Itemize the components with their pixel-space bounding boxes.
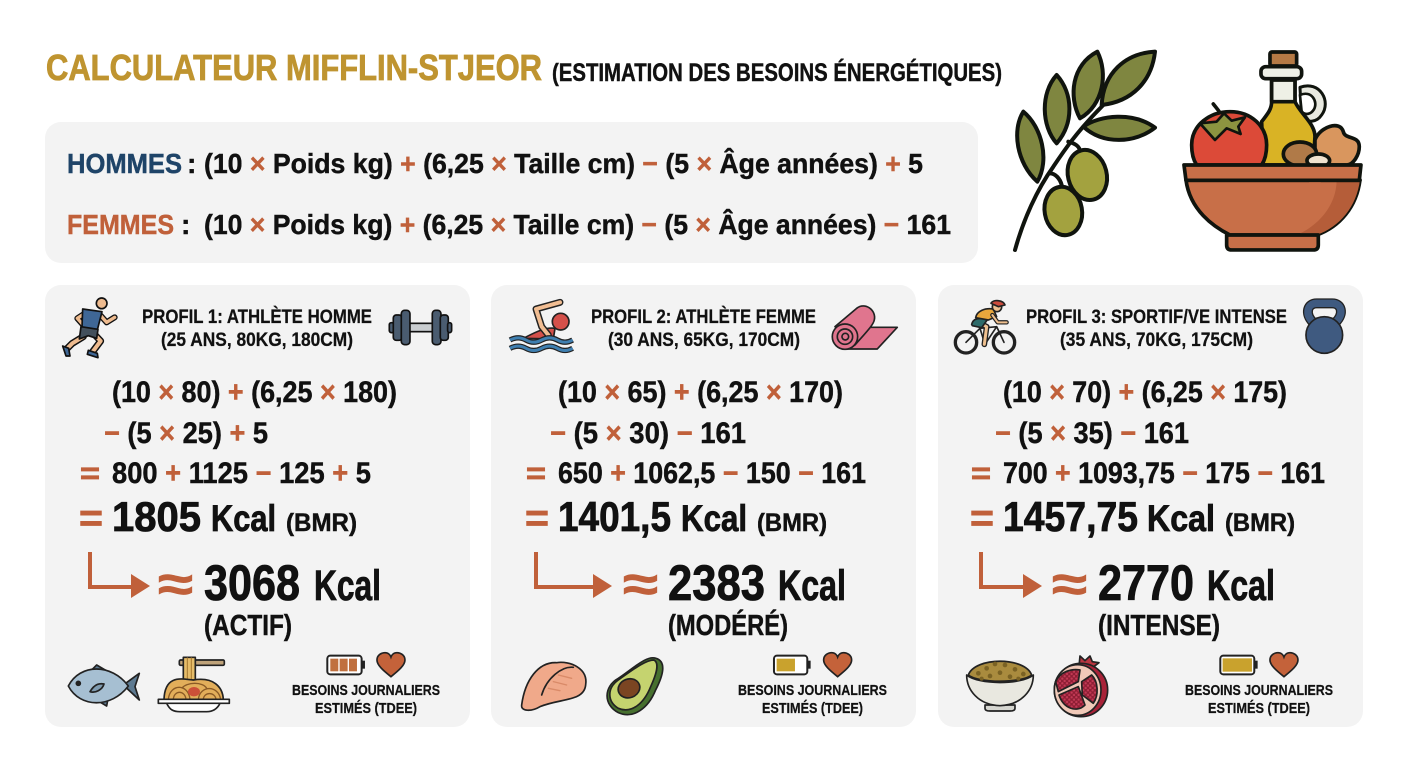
calculation lines	[971, 376, 1325, 490]
icon: runner	[63, 298, 115, 358]
BMR result: (BMR)	[286, 509, 357, 537]
TDEE result: ≈	[1052, 556, 1087, 612]
icon: bowl with tomato, olive oil and nuts	[1184, 52, 1361, 250]
profile 3 heading: (35 ANS, 70KG, 175CM)	[1060, 329, 1253, 351]
icon: heart	[1270, 653, 1298, 677]
BMR result	[970, 493, 1295, 540]
panel: profile 2	[491, 285, 916, 727]
icon: battery full	[1220, 656, 1258, 674]
TDEE caption	[738, 683, 887, 717]
panel: profile 3	[938, 285, 1363, 727]
formula: men: :	[187, 148, 196, 179]
icon: battery high	[327, 656, 365, 674]
icon: avocado	[607, 658, 663, 715]
icon: cyclist	[955, 301, 1015, 353]
TDEE result: (ACTIF)	[204, 610, 292, 642]
TDEE result: Kcal	[314, 562, 381, 610]
title: CALCULATEUR MIFFLIN-STJEOR	[46, 47, 542, 88]
calculation lines: (10 × 70) + (6,25 × 175)	[1003, 376, 1287, 409]
calculation lines: =	[526, 457, 546, 490]
TDEE result: 2770	[1098, 555, 1194, 611]
formula: men: HOMMES	[67, 148, 182, 179]
calculation lines: (10 × 80) + (6,25 × 180)	[112, 376, 397, 409]
icon: lentil bowl	[967, 661, 1033, 711]
profile 3 heading	[1026, 306, 1287, 351]
icon: heart	[377, 653, 405, 677]
profile 3 heading: PROFIL 3: SPORTIF/VE INTENSE	[1026, 306, 1287, 328]
BMR result: 1805	[112, 493, 201, 540]
panel: formulas	[45, 122, 978, 263]
BMR result: (BMR)	[757, 509, 827, 537]
icon: yoga mat	[832, 306, 897, 349]
icon: chicken breast	[522, 662, 586, 710]
TDEE result: (INTENSE)	[1098, 610, 1220, 642]
panel: profile 1	[45, 285, 470, 727]
TDEE caption: ESTIMÉS (TDEE)	[315, 700, 417, 717]
TDEE result: Kcal	[1207, 562, 1275, 610]
TDEE caption: BESOINS JOURNALIERS	[738, 683, 887, 699]
formula: men: (10 × Poids kg) + (6,25 × Taille cm) − (5 × Âge années) + 5	[204, 148, 923, 179]
TDEE caption: BESOINS JOURNALIERS	[1185, 683, 1333, 699]
calculation lines: 700 + 1093,75 − 175 − 161	[1003, 457, 1325, 490]
calculation lines: =	[971, 457, 991, 490]
formula: women: :	[181, 209, 190, 240]
BMR result: 1457,75	[1003, 493, 1138, 540]
TDEE result: ≈	[623, 556, 658, 612]
BMR result: =	[79, 498, 103, 540]
title	[46, 47, 1002, 88]
icon: fish	[68, 665, 139, 706]
TDEE caption: BESOINS JOURNALIERS	[292, 683, 440, 699]
TDEE result: Kcal	[778, 562, 846, 610]
formula: women: (10 × Poids kg) + (6,25 × Taille cm) − (5 × Âge années) − 161	[204, 209, 951, 240]
profile 2 heading: (30 ANS, 65KG, 170CM)	[608, 329, 800, 351]
TDEE result: ≈	[158, 556, 193, 612]
arrow	[979, 552, 1042, 598]
BMR result: 1401,5	[558, 493, 671, 540]
BMR result: (BMR)	[1225, 509, 1295, 537]
calculation lines: =	[80, 457, 100, 490]
icon: pomegranate	[1054, 656, 1108, 717]
BMR result: Kcal	[681, 498, 747, 539]
calculation lines	[80, 376, 397, 490]
TDEE caption	[1185, 683, 1333, 717]
calculation lines: − (5 × 30) − 161	[550, 417, 746, 450]
TDEE result: 3068	[204, 555, 300, 611]
calculation lines: − (5 × 25) + 5	[104, 417, 268, 450]
TDEE result: (MODÉRÉ)	[668, 608, 788, 642]
profile 2 heading: PROFIL 2: ATHLÈTE FEMME	[591, 305, 816, 328]
title: (ESTIMATION DES BESOINS ÉNERGÉTIQUES)	[552, 58, 1002, 87]
BMR result: Kcal	[211, 498, 276, 539]
icon: kettlebell	[1306, 303, 1343, 353]
icon: battery medium	[774, 656, 811, 674]
icon: olive branch	[1015, 52, 1155, 250]
TDEE result	[623, 555, 846, 642]
TDEE result: 2383	[668, 555, 765, 611]
TDEE caption	[292, 683, 440, 717]
calculation lines: 800 + 1125 − 125 + 5	[112, 457, 371, 490]
calculation lines: 650 + 1062,5 − 150 − 161	[558, 457, 866, 490]
TDEE result	[158, 555, 381, 642]
arrow	[534, 552, 612, 598]
profile 2 heading	[591, 305, 816, 351]
calculation lines	[526, 376, 866, 490]
icon: heart	[824, 653, 852, 677]
profile 1 heading: PROFIL 1: ATHLÈTE HOMME	[142, 305, 372, 328]
TDEE caption: ESTIMÉS (TDEE)	[1208, 700, 1310, 717]
BMR result: Kcal	[1147, 498, 1215, 539]
BMR result	[79, 493, 357, 540]
calculation lines: (10 × 65) + (6,25 × 170)	[558, 376, 843, 409]
icon: dumbbell	[389, 310, 452, 345]
BMR result: =	[970, 498, 994, 540]
icon: pasta	[158, 657, 229, 712]
BMR result: =	[525, 498, 549, 540]
icon: swimmer	[510, 302, 573, 350]
TDEE result	[1052, 555, 1275, 642]
formula: women: FEMMES	[67, 209, 174, 240]
calculation lines: − (5 × 35) − 161	[995, 417, 1189, 450]
BMR result	[525, 493, 827, 540]
profile 1 heading	[142, 305, 372, 351]
profile 1 heading: (25 ANS, 80KG, 180CM)	[161, 329, 353, 351]
TDEE caption: ESTIMÉS (TDEE)	[762, 700, 863, 717]
arrow	[88, 552, 150, 598]
